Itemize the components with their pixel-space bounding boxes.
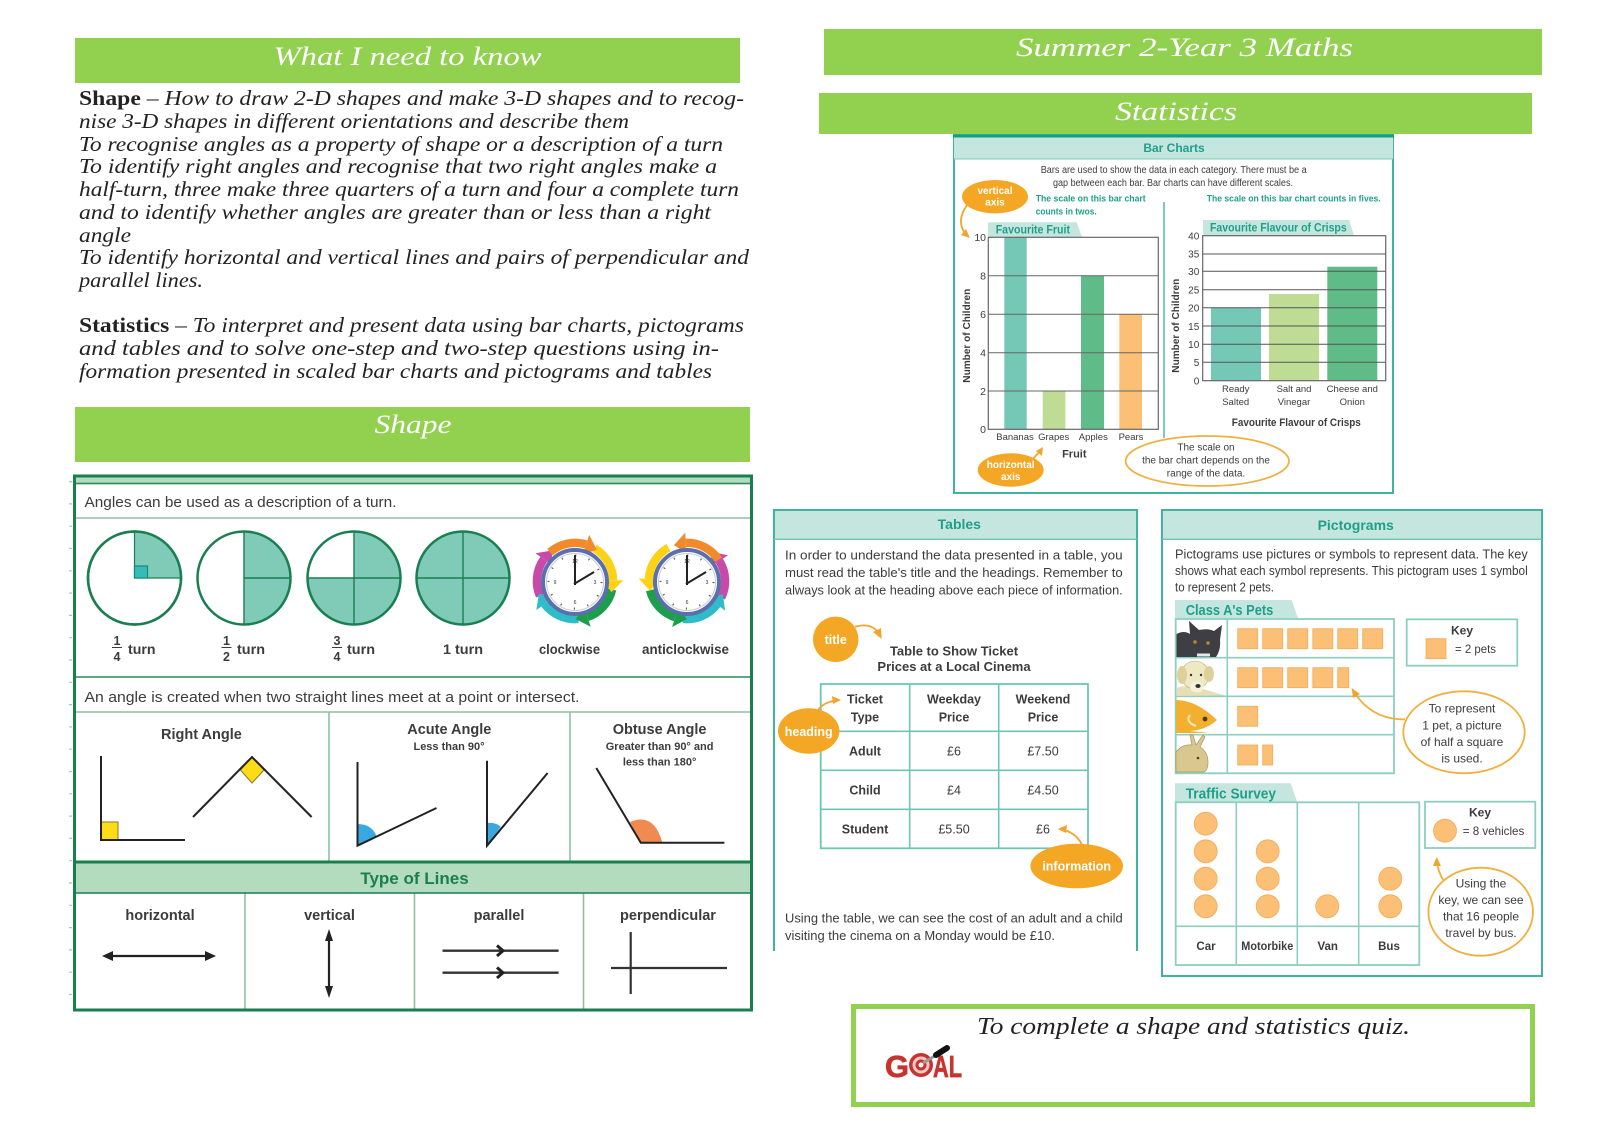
callout: vertical axis [961, 180, 1028, 238]
callout: half a square [1352, 688, 1525, 773]
key: 2 pets [1407, 619, 1517, 666]
chart: Favourite Fruit: Bananas [996, 432, 1034, 443]
table: ticket prices: Adult [849, 745, 882, 759]
diagram: parallel lines [442, 908, 559, 978]
chart: Favourite Flavour of Crisps [1171, 220, 1386, 429]
text block: learning objectives: Statistics – To interpret and present data using bar charts, pictograms [79, 313, 744, 337]
diagram: horizontal line: horizontal [125, 908, 195, 924]
table: ticket prices: £6 [1036, 822, 1050, 836]
heading: Statistics [819, 93, 1532, 134]
heading: Summer 2 - Year 3 Maths [824, 29, 1542, 75]
heading: Tables: Tables [938, 516, 981, 532]
icon: anticlockwise clock [636, 528, 746, 635]
icon: half turn circle [198, 532, 290, 624]
panel: angles and lines [70, 476, 753, 1010]
table: ticket prices: Type [851, 710, 879, 724]
icon: full turn circle [416, 532, 510, 624]
callout: scale depends on range: range of the data. [1167, 468, 1245, 479]
chart: Favourite Flavour of Crisps: 35 [1188, 250, 1200, 260]
pictogram: Traffic Survey: Motorbike [1241, 941, 1293, 953]
pictogram: Traffic Survey: Van [1317, 941, 1338, 953]
chart: Favourite Fruit: Pears [1119, 432, 1144, 443]
callout: vertical axis: vertical [977, 186, 1013, 197]
diagram: horizontal line [102, 908, 216, 961]
icon: anticlockwise clock: 12 [684, 559, 690, 565]
icon: anticlockwise clock: 6 [686, 600, 689, 606]
text block: learning objectives: To recognise angles as a property of shape or a description of a turn [79, 132, 723, 156]
chart: Favourite Fruit: Favourite Fruit [996, 224, 1070, 236]
text: pictograms intro: to represent 2 pets. [1175, 581, 1274, 595]
icon: anticlockwise clock: 9 [666, 580, 669, 586]
text: pictograms intro: shows what each symbol represents. This pictogram uses 1 symbol [1175, 564, 1528, 578]
labels: turn captions: 1 [114, 634, 121, 648]
text: bar chart intro: gap between each bar. Bar charts can have different scales. [1053, 178, 1293, 189]
chart: Favourite Flavour of Crisps: 30 [1188, 267, 1200, 278]
icon: cat [1176, 621, 1222, 657]
icon: rabbit [1176, 735, 1208, 772]
text: tables intro: always look at the heading above each piece of information. [785, 584, 1123, 598]
text block: learning objectives: formation presented in scaled bar charts and pictograms and tables [79, 359, 712, 383]
heading: Statistics: Statistics [1115, 97, 1237, 126]
text: bar chart intro: Bars are used to show the data in each category. There must be a [1041, 165, 1307, 176]
text: goal statement: To complete a shape and statistics quiz. [977, 1014, 1410, 1040]
text block: learning objectives: and tables and to solve one-step and two-step questions using in- [79, 336, 719, 360]
text: tables intro [785, 548, 1123, 598]
labels: turn captions: 3 [334, 634, 341, 648]
text: bar chart intro [1041, 165, 1307, 189]
text: tables intro: must read the table's title and the headings. Remember to [785, 566, 1123, 580]
table: ticket prices: Price [939, 710, 969, 724]
table title [877, 644, 1031, 674]
text block: learning objectives: and to identify whether angles are greater than or less than a right [79, 200, 712, 224]
callout: half a square: 1 pet, a picture [1422, 718, 1502, 732]
chart: Favourite Flavour of Crisps: 25 [1188, 286, 1200, 296]
table: ticket prices: £4 [947, 784, 961, 798]
icon: three quarter turn circle [308, 532, 400, 624]
chart: Favourite Flavour of Crisps: 5 [1194, 358, 1200, 369]
diagram: vertical line [304, 908, 355, 998]
panel: goal [854, 1006, 1532, 1104]
callout: scale depends on range: the bar chart depends on the [1142, 456, 1270, 467]
icon: clockwise clock: 6 [574, 600, 577, 606]
chart: Favourite Flavour of Crisps: Salted [1222, 397, 1249, 408]
icon: fish [1176, 700, 1217, 733]
band: Type of Lines: Type of Lines [360, 869, 469, 888]
table: ticket prices: £5.50 [938, 822, 970, 836]
chart: Favourite Flavour of Crisps: Ready [1222, 384, 1250, 395]
key: 2 pets: Key [1451, 623, 1473, 637]
icon: GOAL logo: AL [933, 1049, 962, 1084]
chart: Favourite Flavour of Crisps: Vinegar [1278, 397, 1310, 408]
labels: turn captions: turn [237, 641, 265, 657]
diagram: right angle [101, 727, 312, 840]
callout: heading: heading [785, 725, 833, 739]
heading: What I need to know [75, 38, 740, 83]
table: ticket prices [821, 684, 1088, 848]
chart: Favourite Fruit: 0 [980, 424, 986, 436]
note: scale in twos [1036, 194, 1146, 218]
text: angle definition: An angle is created when two straight lines meet at a point or intersect. [84, 689, 580, 706]
labels: turn captions: 4 [334, 650, 341, 664]
text block: learning objectives: angle [79, 223, 131, 247]
labels: turn captions: anticlockwise [642, 641, 729, 657]
chart: Favourite Flavour of Crisps: 20 [1188, 304, 1200, 314]
chart: Favourite Fruit [962, 222, 1158, 460]
pictogram: Traffic Survey: Bus [1378, 941, 1400, 953]
text: tables conclusion [785, 911, 1123, 943]
callout: horizontal axis: axis [1001, 472, 1021, 483]
callout: horizontal axis [978, 447, 1044, 487]
chart: Favourite Flavour of Crisps: Number of Children [1171, 279, 1182, 373]
diagram: obtuse angle: less than 180° [623, 757, 696, 769]
callout: 16 people by bus: key, we can see [1438, 893, 1524, 907]
heading: Pictograms: Pictograms [1318, 517, 1394, 533]
table: ticket prices: £7.50 [1027, 745, 1059, 759]
chart: Favourite Fruit: Fruit [1062, 448, 1087, 460]
callout: heading [778, 696, 841, 754]
panel: pictograms [1162, 510, 1542, 976]
table: ticket prices: Weekday [927, 692, 981, 706]
callout: half a square: is used. [1441, 751, 1483, 765]
callout: vertical axis: axis [985, 198, 1005, 209]
callout: 16 people by bus: that 16 people [1443, 910, 1519, 924]
icon: quarter turn circle [88, 532, 181, 624]
diagram: obtuse angle [596, 722, 724, 843]
callout: scale depends on range: The scale on [1177, 443, 1235, 454]
callout: 16 people by bus: Using the [1456, 876, 1507, 890]
text block: learning objectives: half-turn, three make three quarters of a turn and four a complete turn [79, 177, 739, 201]
diagram: parallel lines: parallel [474, 908, 524, 924]
table: ticket prices: £4.50 [1027, 784, 1059, 798]
text: pictograms intro [1175, 547, 1528, 595]
callout: information [1030, 825, 1123, 888]
table: ticket prices: Child [849, 784, 881, 798]
diagram: perpendicular lines [611, 908, 727, 994]
chart: Favourite Fruit: Apples [1079, 432, 1108, 443]
chart: Favourite Fruit: 10 [974, 232, 986, 244]
chart: Favourite Flavour of Crisps: Favourite Flavour of Crisps [1232, 417, 1361, 429]
band: Type of Lines [73, 862, 753, 893]
labels: turn captions: turn [347, 641, 375, 657]
icon: clockwise clock [516, 523, 627, 635]
diagram: acute angle: Less than 90° [413, 741, 485, 753]
chart: Favourite Flavour of Crisps: Cheese and [1327, 384, 1378, 395]
text: tables conclusion: visiting the cinema on a Monday would be £10. [785, 929, 1055, 943]
chart: Favourite Fruit: 2 [980, 386, 986, 398]
heading: Bar Charts: Bar Charts [1143, 141, 1205, 155]
chart: Favourite Flavour of Crisps: Onion [1340, 397, 1365, 408]
table: ticket prices: Student [842, 822, 889, 836]
callout: scale depends on range [1126, 436, 1289, 486]
labels: turn captions: clockwise [539, 641, 600, 657]
text block: learning objectives: To identify horizontal and vertical lines and pairs of perpendicular and [79, 245, 750, 269]
key: 2 pets: = 2 pets [1455, 642, 1496, 656]
labels: turn captions [112, 634, 729, 664]
chart: Favourite Fruit: 8 [980, 270, 986, 282]
icon: clockwise clock: 12 [572, 559, 578, 565]
chart: Favourite Fruit: 4 [980, 348, 986, 360]
icon: GOAL logo: G [885, 1049, 909, 1084]
panel: tables [774, 510, 1137, 951]
callout: half a square: To represent [1429, 702, 1496, 716]
labels: turn captions: turn [128, 641, 156, 657]
chart: Favourite Flavour of Crisps: Salt and [1277, 384, 1311, 395]
chart: Favourite Flavour of Crisps: 10 [1188, 340, 1200, 351]
text block: learning objectives: To identify right angles and recognise that two right angles make a [79, 154, 717, 178]
table: ticket prices: Price [1028, 710, 1058, 724]
chart: Favourite Flavour of Crisps: Favourite Flavour of Crisps [1210, 223, 1347, 235]
pictogram: Traffic Survey: Traffic Survey [1186, 786, 1276, 802]
heading: Shape [75, 407, 750, 462]
table: ticket prices: Weekend [1016, 692, 1070, 706]
icon: clockwise clock: 9 [554, 580, 557, 586]
icon: clockwise clock: 3 [594, 580, 597, 586]
text block: learning objectives: nise 3-D shapes in different orientations and describe them [79, 109, 629, 133]
panel: bar charts [953, 135, 1394, 493]
text: tables conclusion: Using the table, we can see the cost of an adult and a child [785, 911, 1123, 925]
callout: 16 people by bus [1428, 857, 1533, 956]
key: 8 vehicles: Key [1469, 806, 1491, 820]
diagram: obtuse angle: Greater than 90° and [606, 741, 713, 753]
pictogram: Traffic Survey: Car [1196, 941, 1216, 953]
table: ticket prices: £6 [947, 745, 961, 759]
chart: Favourite Fruit: Grapes [1038, 432, 1070, 443]
text: pictograms intro: Pictograms use pictures or symbols to represent data. The key [1175, 547, 1528, 561]
key: 8 vehicles: = 8 vehicles [1463, 824, 1524, 838]
diagram: right angle: Right Angle [161, 727, 242, 743]
icon: dog [1177, 661, 1225, 696]
callout: horizontal axis: horizontal [987, 460, 1035, 471]
chart: Favourite Flavour of Crisps: 40 [1188, 232, 1200, 242]
icon: GOAL logo [885, 1048, 962, 1084]
table title: Prices at a Local Cinema [877, 659, 1031, 674]
pictogram: Class A's Pets [1175, 600, 1394, 773]
diagram: obtuse angle: Obtuse Angle [613, 722, 706, 738]
table: ticket prices: Ticket [847, 692, 884, 706]
labels: turn captions: 1 [223, 634, 230, 648]
icon: anticlockwise clock: 3 [706, 580, 709, 586]
callout: information: information [1042, 860, 1111, 874]
chart: Favourite Fruit: 6 [980, 309, 986, 321]
note: scale in twos: The scale on this bar chart [1036, 194, 1146, 205]
pictogram: Class A's Pets: Class A's Pets [1186, 603, 1273, 619]
text block: learning objectives: parallel lines. [77, 268, 203, 292]
table title: Table to Show Ticket [890, 644, 1019, 659]
chart: Favourite Flavour of Crisps: 0 [1194, 376, 1200, 388]
text: angles as a turn: Angles can be used as a description of a turn. [84, 494, 396, 511]
callout: title: title [825, 633, 847, 647]
heading: What I need to know: What I need to know [274, 42, 542, 71]
key: 8 vehicles [1425, 802, 1535, 848]
note: scale in fives: The scale on this bar chart counts in fives. [1207, 194, 1381, 205]
diagram: acute angle [358, 722, 548, 846]
labels: turn captions: 2 [223, 650, 230, 664]
callout: 16 people by bus: travel by bus. [1445, 926, 1517, 940]
text block: learning objectives: Shape – How to draw 2-D shapes and make 3-D shapes and to recog- [79, 86, 744, 110]
chart: Favourite Flavour of Crisps: 15 [1188, 322, 1200, 333]
diagram: vertical line: vertical [304, 908, 355, 924]
text block: learning objectives [77, 86, 750, 383]
chart: Favourite Fruit: Number of Children [962, 289, 973, 383]
labels: turn captions: 4 [114, 650, 121, 664]
callout: title [813, 617, 882, 662]
diagram: acute angle: Acute Angle [407, 722, 491, 738]
text: tables intro: In order to understand the data presented in a table, you [785, 548, 1123, 562]
labels: turn captions: 1 turn [443, 641, 483, 657]
diagram: perpendicular lines: perpendicular [620, 908, 716, 924]
note: scale in twos: counts in twos. [1036, 207, 1097, 218]
heading: Shape: Shape [374, 410, 452, 439]
callout: half a square: of half a square [1421, 735, 1504, 749]
pictogram: Traffic Survey [1175, 783, 1419, 965]
heading: Summer 2 - Year 3 Maths: Summer 2-Year 3 Maths [1016, 33, 1353, 62]
